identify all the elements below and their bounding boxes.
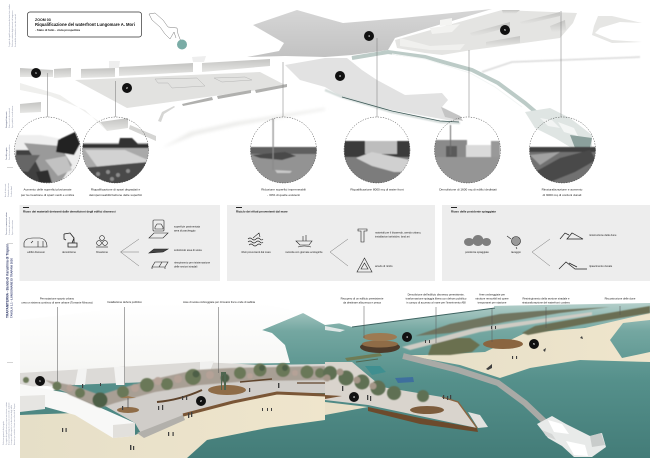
panel: reuse of beached posidonia: posidonie spiaggiate: [465, 250, 489, 254]
sidebar: vertical credits: TRAPANITERNA - Bando di Karushina di Trapani: [6, 244, 10, 318]
model: north plateau: [395, 10, 577, 55]
arrows to outputs: [120, 239, 139, 266]
render: numbered markers: 5: [533, 342, 535, 346]
render: callouts: temporanei per stazione: [478, 300, 507, 304]
render: callouts: Aree ombreggiate per: [479, 292, 505, 296]
render: callouts: Installazione dehors pubblico: [107, 300, 142, 304]
render: breakwater: [403, 356, 545, 422]
sidebar: vertical credits: Il sistema del waterfront: [8, 217, 11, 235]
render: numbered markers: 3: [353, 395, 355, 399]
arrows to outputs: [330, 239, 348, 266]
sidebar: vertical credits: dismessi per restituire il fronte mare alla città di Trapani: [13, 403, 16, 445]
render: callouts: Permutazione spazio urbano: [40, 296, 75, 300]
photo 4: water front rocks: [344, 141, 410, 184]
numbered markers top model: 1: [35, 71, 37, 75]
photo 3: asphalt yard: [250, 118, 318, 184]
panel: recycling marine waste: Riciclo dei rifiuti provenienti dal mare: [236, 210, 288, 214]
numbered markers top model: [31, 25, 510, 93]
render: pavilion: [345, 333, 400, 362]
sidebar: vertical credits: di spazi pubblici lungo la costa con aree verdi e pedonali: [8, 402, 10, 445]
panel: reuse of demolition materials: frituazione: [96, 250, 109, 254]
title box: [28, 12, 142, 37]
render: numbered markers: [35, 332, 539, 406]
title box: - Stato di fatto - vista prospettica: [35, 28, 80, 32]
panel: reuse of demolition materials: superficie pavimentata: [174, 224, 201, 228]
model: grey quay 3: [285, 58, 462, 122]
render: callouts: da destinare alla pesca e pesca: [343, 300, 381, 304]
panel: reuse of beached posidonia: lavaggio: [511, 250, 521, 254]
icon: dune: [560, 233, 583, 239]
icon: waste on waves: [248, 233, 263, 246]
captions under photos: Aumento delle superfici pluviumate: [24, 188, 72, 192]
model: seaside wall shadow: [100, 118, 128, 131]
panel: recycling marine waste: raccolta con giornate ecologiche: [285, 250, 323, 254]
photo 2: degraded area: [82, 138, 150, 185]
title box: Riqualificazione del waterfront Lungomare A. Mori: [35, 22, 135, 27]
icon: crushed rubble: [96, 236, 108, 247]
leader lines top model: [47, 11, 561, 117]
icon: road section: [152, 262, 168, 269]
model: breakwater path: [352, 52, 545, 120]
render: callouts: trasformazione spiaggia libera con dehors pubblico: [406, 296, 467, 300]
render: north white quay: [260, 303, 495, 327]
render: main peninsula sand: [405, 313, 650, 378]
render: south jetty: [325, 362, 477, 428]
captions under photos: Riqualificazione di spazi degradati e: [91, 188, 140, 192]
render: white urban mass: [20, 303, 303, 378]
sidebar: vertical credits: Strategia di intervento: [5, 112, 8, 128]
render: callouts: Riscostruzione delle dune: [605, 296, 636, 300]
panel: reuse of demolition materials: delle sezioni stradali: [174, 264, 198, 268]
captions under photos: di 3000 mq di cordoni dunali: [543, 193, 582, 197]
top axonometric model: [20, 9, 642, 150]
photo 1: eroded embankment: [14, 132, 82, 183]
icon: bollard: [358, 229, 367, 242]
numbered markers top model: 3: [339, 74, 341, 78]
render: white seawall: [20, 384, 135, 438]
sidebar: vertical credits: il recupero delle superfici e la demolizione degli edifici: [10, 404, 13, 445]
panel: reuse of demolition materials: area di parcheggio: [174, 228, 196, 232]
render: callouts: in campo di accesso al mare per l'inserimento ABI: [406, 300, 466, 304]
panel: reuse of demolition materials: demolizione: [62, 250, 76, 254]
render: people: [62, 326, 583, 450]
numbered markers top model: 5: [504, 28, 506, 32]
sidebar: vertical credits: Progetto di riqualificazione urbana del waterfront cittadino: [8, 4, 11, 47]
render: numbered markers: 1: [39, 379, 41, 383]
sidebar: vertical credits: Demolizioni selettive: [8, 145, 11, 160]
render: plaza: [45, 376, 325, 437]
panel: reuse of demolition materials: Riuso dei materiali derivanti dalle demolizioni degli edifici dismessi: [23, 210, 116, 214]
captions under photos: per la creazione di spazi verdi e ombra: [21, 193, 74, 197]
sidebar: vertical credits: TAVOLA 1.1 - LUNGOMARE DI TRAPANI 2020: [10, 258, 14, 318]
icon: posidonia heaps: [464, 235, 491, 246]
sidebar: vertical credits: [2, 4, 17, 445]
render: callouts: crea un sistema continuo di aree urbane (Tornante Mirzuna): [21, 300, 93, 304]
icon: collection boat: [296, 235, 312, 247]
photo 5: derelict buildings: [434, 125, 501, 184]
numbered markers top model: 4: [368, 34, 370, 38]
model: breakwater blocks: [525, 108, 592, 150]
render: jetty trees: [323, 366, 429, 402]
panel: reuse of beached posidonia: ripascimento dunale: [589, 264, 613, 268]
panel: reuse of beached posidonia: ricostruzione delle dune: [589, 233, 617, 237]
sidebar: vertical credits: Spazi pubblici e verde urbano: [11, 106, 14, 128]
sidebar: vertical credits: Il progetto di riqualificazione propone un sistema continuo: [5, 402, 8, 445]
captions under photos: Riduzione superfici impermeabili: [261, 188, 306, 192]
render: callouts: strutture removibili ed opere: [475, 296, 509, 300]
sidebar: vertical credits: Fasi del progetto: [5, 147, 8, 160]
render: numbered markers: 2: [200, 399, 202, 403]
icon: beach nourishment: [559, 262, 587, 269]
panel: recycling marine waste: installazioni artistiche, land art: [375, 234, 410, 238]
model: promenade benches: [158, 84, 287, 122]
panel: reuse of demolition materials: edifici dismessi: [27, 250, 45, 254]
sidebar: vertical credits: Relazione sintetica degli interventi sul lungomare: [11, 10, 14, 47]
render: leader lines: [57, 306, 620, 385]
model: left street buildings: [20, 56, 270, 113]
title box: ZOOM 03: [35, 18, 51, 22]
panel: reuse of demolition materials: riempimento per risistemazione: [174, 260, 211, 264]
icon: slab: [149, 249, 168, 253]
render: numbered markers: 4: [406, 335, 408, 339]
bottom perspective render: [20, 292, 650, 458]
render: rock blocks: [537, 416, 606, 457]
icon: washing: [507, 236, 520, 249]
panel: reuse of demolition materials: [20, 205, 220, 281]
render: trees band: [23, 363, 325, 408]
panel: reuse of beached posidonia: [442, 205, 650, 281]
captions under photos: - 30% di quelle esistenti: [267, 193, 300, 197]
model: central square: [75, 72, 287, 108]
sidebar: vertical credits: Cordoni dunali: [10, 185, 13, 197]
render: callouts: Demolizione dell'edificio dismesso preesistente,: [408, 292, 465, 296]
locator map: [149, 13, 187, 50]
render: street wall: [20, 362, 325, 387]
icon: recycling triangle: [357, 258, 372, 272]
sidebar: vertical credits: Relazione generale del progetto: [2, 421, 5, 445]
render: wood edge: [183, 393, 342, 415]
sidebar: vertical credits: Sostenibilità ambientale e riuso dei materiali: [14, 13, 17, 47]
captions under photos: deimpermeabilizzazione delle superfici: [89, 193, 142, 197]
sidebar: vertical credits: Percorsi e connessioni urbane: [5, 212, 8, 235]
panel: reuse of demolition materials: sottofondo area di sosta: [174, 248, 202, 252]
model: grey sea wedge: [247, 9, 492, 57]
sidebar: vertical credits: Rinaturalizzazione: [7, 183, 10, 197]
render: moored boats: [365, 366, 386, 375]
render: callouts: [21, 292, 636, 304]
render: callouts: Aree di sosta ombreggiate per ritrovarsi fra le onde di sabbia: [183, 300, 256, 304]
sidebar: vertical credits: Aree di intervento: [4, 184, 7, 197]
dashed circles around photos: [14, 117, 596, 183]
render: callouts: Restringimento della sezione stradale e: [522, 296, 570, 300]
render: dune vegetation: [402, 306, 650, 355]
captions under photos: [21, 188, 583, 197]
panel: recycling marine waste: arredo di riciclo: [375, 264, 393, 268]
render: benches and planters: [157, 390, 202, 402]
panel: reuse of beached posidonia: Riuso delle posidonie spiaggiate: [451, 210, 496, 214]
sidebar: vertical credits: Spazi e attrezzature: [11, 220, 14, 235]
photo 6: dunes: [529, 147, 597, 184]
render: sea: [20, 303, 650, 458]
model: coast shadows: [482, 57, 640, 72]
captions under photos: Rinaturalizzazione e aumento: [542, 188, 583, 192]
icon: excavator: [64, 233, 77, 247]
arrows to outputs: [532, 239, 550, 266]
panel: recycling marine waste: [227, 205, 435, 281]
render: callouts: rinaturalizzazione del waterfront costiero: [522, 300, 571, 304]
sidebar: vertical credits: Riuso e riciclo dei materiali: [8, 107, 11, 128]
numbered markers top model: 2: [126, 86, 128, 90]
render: steps: [137, 415, 185, 438]
render: beach left: [20, 393, 325, 458]
panel: recycling marine waste: materiali per il bioarredo, arredo urbano,: [375, 230, 422, 234]
captions under photos: Riqualificazione 8000 mq di water front: [350, 188, 404, 192]
render: callouts: Recupero di un edificio preesistente: [341, 296, 384, 300]
panel: recycling marine waste: rifiuti provenienti dal mare: [241, 250, 271, 254]
icon: parking surface: [149, 220, 168, 238]
captions under photos: Demolizione di 1600 mq di edifici dedistati: [439, 188, 497, 192]
icon: abandoned building: [24, 238, 47, 247]
